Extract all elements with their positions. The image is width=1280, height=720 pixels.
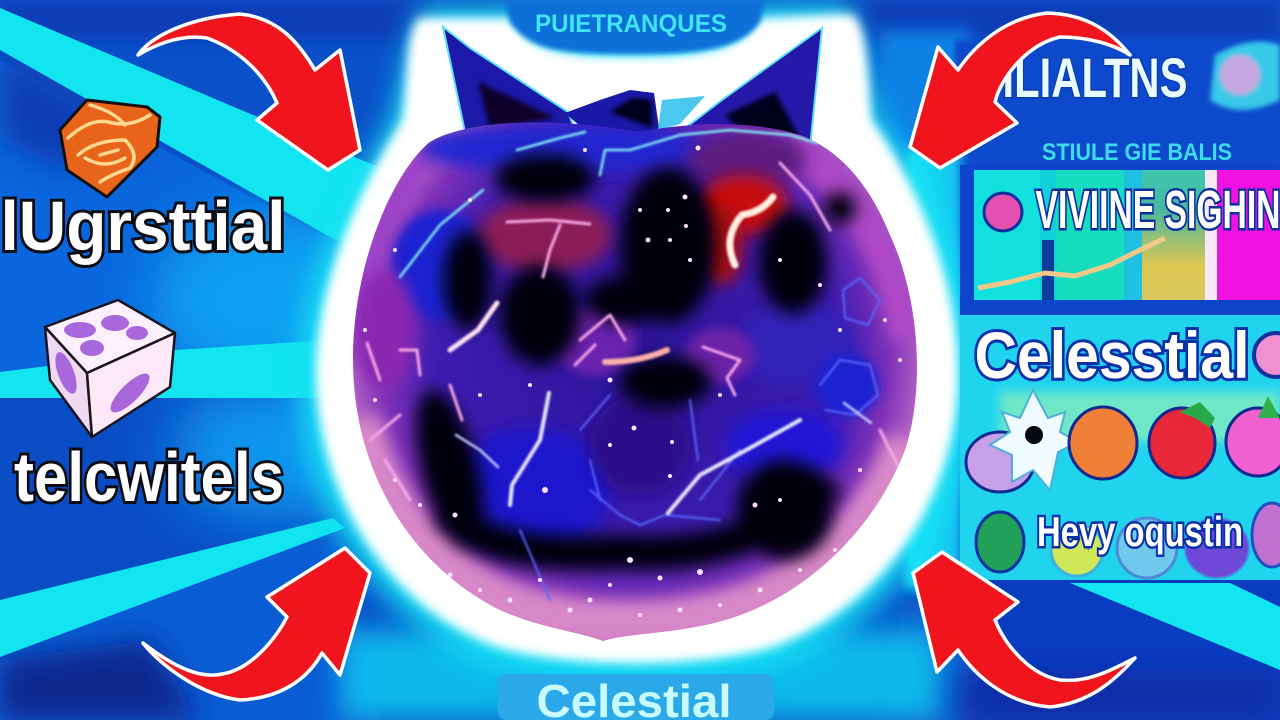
- panel: right dashboard: [960, 139, 1280, 580]
- heading: small caption: STIULE GIE BALIS: [1042, 139, 1232, 166]
- left label: bottom: telcwitels: [14, 438, 284, 516]
- icon: blurred badge: [1210, 42, 1280, 110]
- panel: top title tab: [505, 0, 765, 54]
- colour clouds: [355, 122, 908, 622]
- icons: fruit row: [966, 390, 1280, 492]
- glow halo: [300, 4, 975, 680]
- lightning veins: [367, 130, 900, 600]
- arrow: top left: [138, 14, 360, 170]
- icon: orange rune block: [60, 100, 160, 197]
- icon: orb horns: [443, 27, 822, 148]
- chart: colour bars: [960, 165, 1280, 315]
- orb with glow: [300, 4, 975, 680]
- black patches: [403, 154, 856, 560]
- row: lower badges: [976, 503, 1280, 578]
- panel: bottom Celestial tab: [498, 674, 774, 720]
- left label: top: lUgrsttial: [0, 187, 286, 265]
- arrow: top right: [910, 13, 1130, 168]
- icon: purple dice: [45, 300, 175, 437]
- arrow: bottom right: [913, 552, 1135, 707]
- icon: pink ring: [1254, 333, 1280, 377]
- arrow: bottom left: [143, 548, 370, 700]
- sparkle dots: [363, 146, 902, 617]
- heading: Celestial: Celesstial: [974, 318, 1250, 392]
- panel: right header: ILIALTNS: [1002, 46, 1188, 109]
- icon: pink flower: [984, 193, 1022, 231]
- panel: top title tab: PUIETRANQUES: [535, 10, 727, 38]
- icon: orb sphere: [353, 122, 917, 641]
